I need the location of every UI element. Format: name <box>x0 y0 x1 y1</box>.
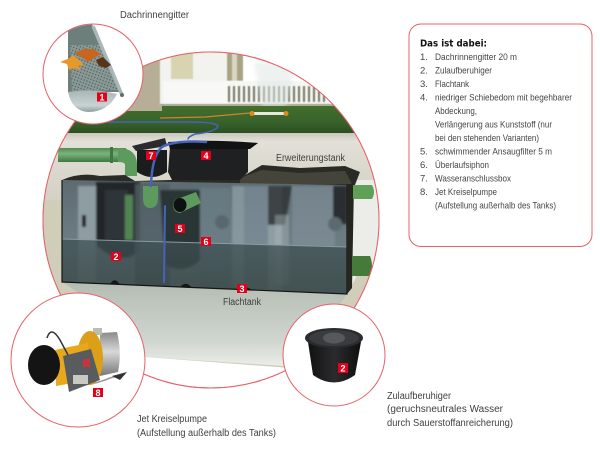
panel: Jet Kreiselpumpe detail <box>11 293 145 427</box>
list items: Abdeckung, <box>435 106 477 117</box>
badge 7 <box>146 151 156 161</box>
list items: bei den stehenden Varianten) <box>435 133 539 144</box>
list items: Jet Kreiselpumpe <box>435 187 497 198</box>
badge 2 bucket: 2 <box>340 364 346 374</box>
house wall <box>132 52 244 106</box>
centre green pipes <box>143 186 201 213</box>
green inlet pipe <box>58 147 137 176</box>
icon: pump <box>28 328 127 392</box>
badge 2 bucket <box>338 363 348 374</box>
badge 6 <box>201 237 211 247</box>
list items: Wasseranschlussbox <box>435 174 511 184</box>
picket fence <box>160 81 335 106</box>
tank body <box>62 175 347 300</box>
list items: 1. <box>420 52 428 63</box>
list items: schwimmender Ansaugfilter 5 m <box>435 146 552 158</box>
panel: Das ist dabei list <box>409 24 592 246</box>
badge 4 <box>201 151 211 161</box>
badge 5 <box>175 224 185 234</box>
panel: Zulaufberuhiger detail <box>283 304 385 406</box>
label: Zulaufberuhiger: durch Sauerstoffanreicherung) <box>387 418 513 429</box>
list heading: Das ist dabei: <box>420 38 487 50</box>
icon: gutter <box>68 24 124 112</box>
list items: Flachtank <box>435 79 469 90</box>
badge 7: 7 <box>148 151 154 161</box>
badge 8: 8 <box>95 388 101 398</box>
list items: 8. <box>420 187 428 198</box>
tank ribs and arches <box>78 182 347 290</box>
badge 2 tank: 2 <box>113 252 119 262</box>
list items: Dachrinnengitter 20 m <box>435 52 517 63</box>
badge 2 tank <box>111 252 121 262</box>
list items: Verlängerung aus Kunststoff (nur <box>435 120 552 130</box>
badge 3 <box>237 284 247 294</box>
garden hose and sprinkler <box>160 111 288 118</box>
badge 1 <box>97 92 107 102</box>
right green pipes <box>352 185 374 276</box>
icon: bucket <box>305 328 363 382</box>
label: Zulaufberuhiger <box>387 391 513 429</box>
badge 3: 3 <box>239 284 245 294</box>
badge 4: 4 <box>203 151 209 161</box>
label: Flachtank: Flachtank <box>223 297 262 308</box>
tank right side wall <box>347 183 354 294</box>
label: Zulaufberuhiger: (geruchsneutrales Wasser <box>387 404 504 415</box>
list items: 7. <box>420 174 428 184</box>
list items: 3. <box>420 79 428 90</box>
label: Dachrinnengitter: Dachrinnengitter <box>120 10 190 21</box>
icon: leaves <box>60 49 111 70</box>
badge 6: 6 <box>203 237 209 247</box>
list items <box>420 52 572 212</box>
label: Jet Kreiselpumpe: Jet Kreiselpumpe <box>137 414 207 425</box>
label: Jet Kreiselpumpe <box>137 414 276 439</box>
list items: Zulaufberuhiger <box>435 66 492 76</box>
label: Erweiterungstank: Erweiterungstank <box>276 153 346 164</box>
water in tank <box>62 240 346 294</box>
sprinkler spray <box>254 62 294 106</box>
list items: 6. <box>420 160 428 171</box>
ground under tank <box>40 200 380 368</box>
list items: Überlaufsiphon <box>435 160 489 171</box>
water box <box>132 138 167 177</box>
list items: niedriger Schiebedom mit begehbarer <box>435 92 572 104</box>
panel: Dachrinnengitter detail <box>43 24 143 124</box>
tank top surface <box>62 165 360 185</box>
list items: (Aufstellung außerhalb des Tanks) <box>435 200 556 212</box>
lawn <box>68 106 354 133</box>
label: Zulaufberuhiger: Zulaufberuhiger <box>387 391 452 402</box>
list items: 2. <box>420 66 428 76</box>
panel: main cutaway scene <box>40 45 382 388</box>
soil above tank <box>40 133 380 203</box>
list items: 5. <box>420 146 428 158</box>
badge 5: 5 <box>177 224 183 234</box>
list items: 4. <box>420 92 428 104</box>
blue suction hose <box>105 122 218 282</box>
shaft dome <box>168 141 258 180</box>
badge 1: 1 <box>99 92 105 102</box>
badge 8 <box>93 388 103 398</box>
label: Jet Kreiselpumpe: (Aufstellung außerhalb des Tanks) <box>137 428 276 439</box>
